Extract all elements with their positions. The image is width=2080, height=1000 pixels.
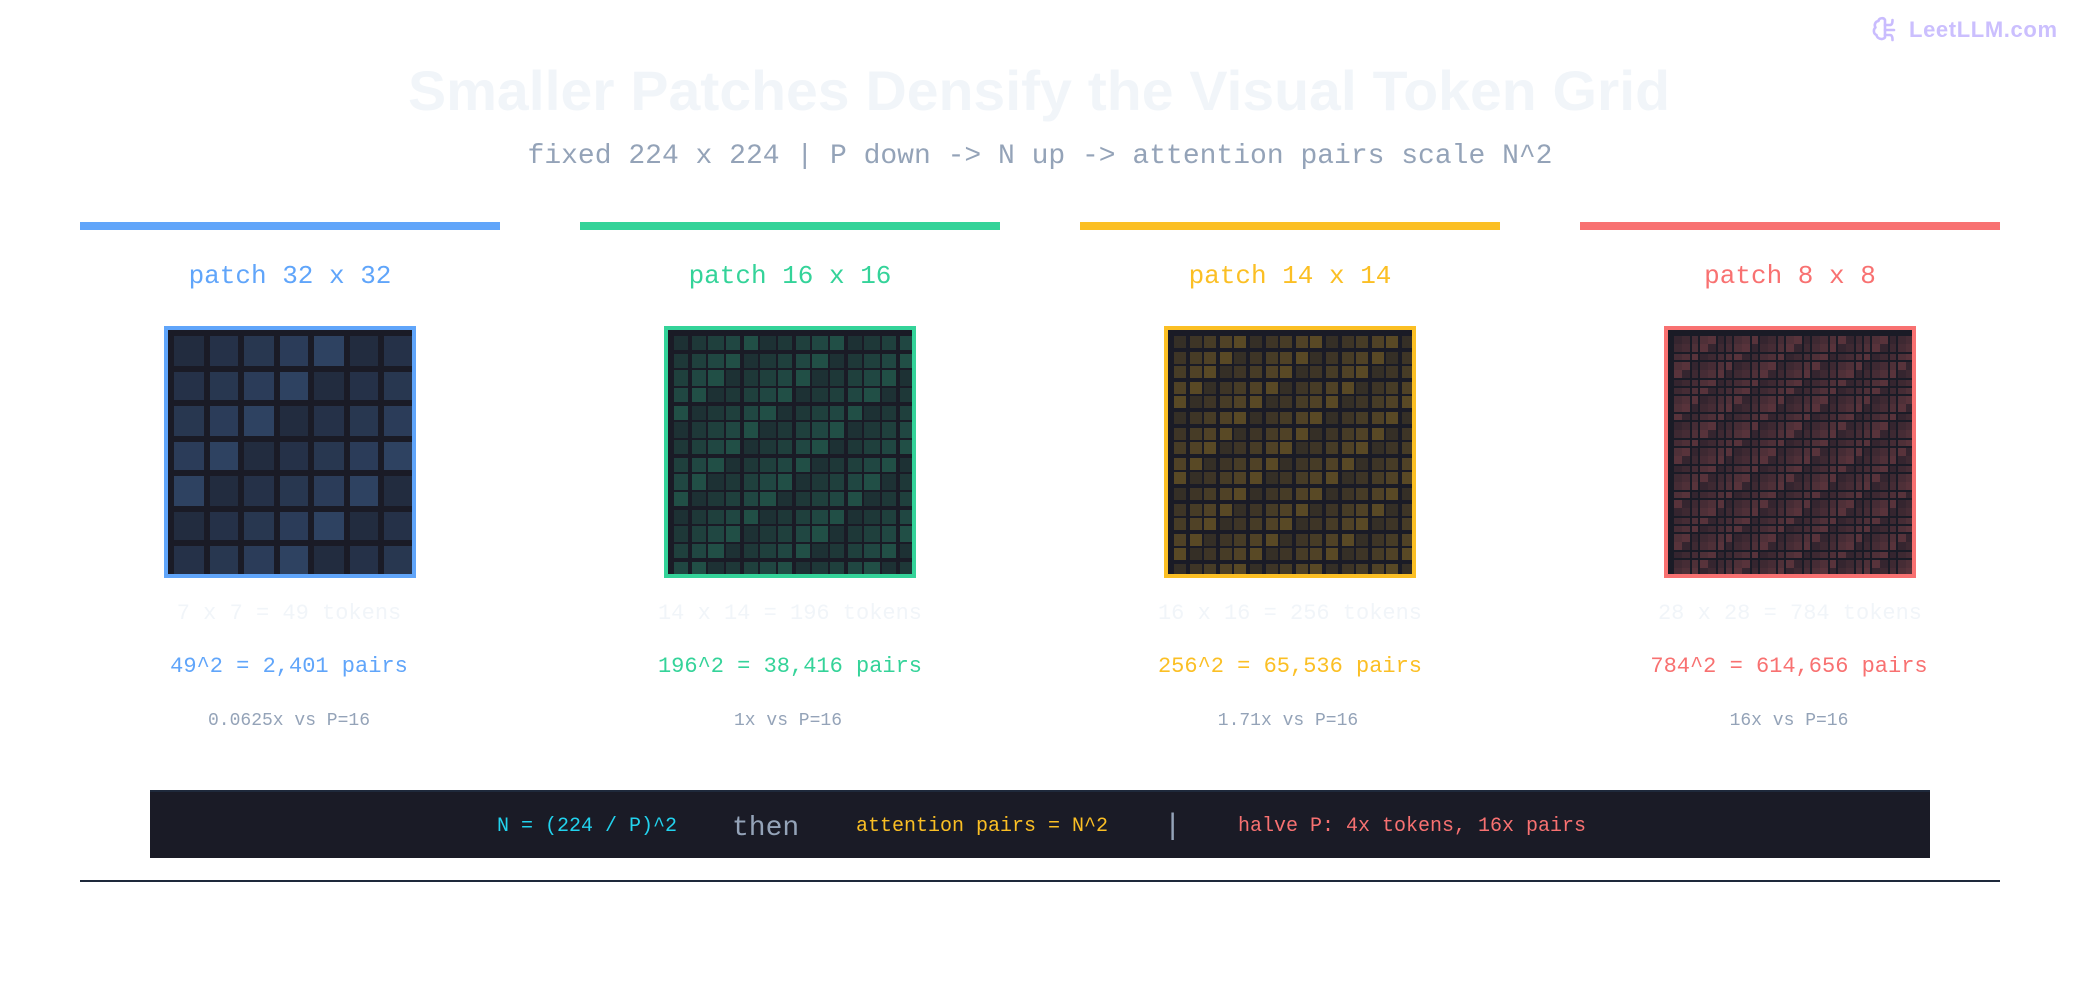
- formula bar: [150, 790, 1930, 858]
- patch grid: 28 x 28: [1666, 328, 1914, 576]
- accent bar: green: [580, 222, 1000, 230]
- subtitle: fixed 224 x 224 | P down -> N up -> attention pairs scale N^2: [528, 141, 1552, 172]
- patch grid: 14 x 14: [666, 328, 914, 576]
- heading: patch 8 x 8: patch 8 x 8: [1704, 261, 1876, 291]
- rule: halving P: halve P: 4x tokens, 16x pairs: [1238, 815, 1586, 838]
- token count: 14 x 14 = 196 tokens: [658, 601, 922, 626]
- attention pairs: 256^2 = 65,536 pairs: [1158, 654, 1422, 679]
- bar background: [150, 790, 1930, 858]
- formula: token count: N = (224 / P)^2: [497, 815, 677, 838]
- logo text: LeetLLM.com: [1909, 17, 2057, 42]
- formula: attention pairs: attention pairs = N^2: [856, 815, 1108, 838]
- token count: 28 x 28 = 784 tokens: [1658, 601, 1922, 626]
- attention pairs: 49^2 = 2,401 pairs: [170, 654, 408, 679]
- panel: patch 14 x 14: [1080, 222, 1500, 731]
- heading: patch 16 x 16: patch 16 x 16: [689, 261, 891, 291]
- separator: |: [1164, 810, 1182, 844]
- patch grid: 16 x 16: [1166, 328, 1414, 576]
- ratio: 0.0625x vs P=16: [208, 711, 370, 731]
- heading: patch 14 x 14: patch 14 x 14: [1189, 261, 1391, 291]
- logo: LeetLLM.com: [1874, 17, 2057, 42]
- attention pairs: 784^2 = 614,656 pairs: [1650, 654, 1928, 679]
- panel: patch 8 x 8: [1580, 222, 2000, 731]
- heading: patch 32 x 32: patch 32 x 32: [189, 261, 391, 291]
- token count: 7 x 7 = 49 tokens: [177, 601, 401, 626]
- ratio: 1.71x vs P=16: [1218, 711, 1358, 731]
- attention pairs: 196^2 = 38,416 pairs: [658, 654, 922, 679]
- ratio: 1x vs P=16: [734, 711, 842, 731]
- panel: patch 16 x 16: [580, 222, 1000, 731]
- accent bar: blue: [80, 222, 500, 230]
- connector: then: then: [732, 813, 799, 844]
- ratio: 16x vs P=16: [1730, 711, 1848, 731]
- accent bar: red: [1580, 222, 2000, 230]
- patch grid: 7 x 7: [166, 328, 414, 576]
- icon: brain: [1874, 18, 1894, 40]
- panel: patch 32 x 32: [80, 222, 500, 731]
- title: Smaller Patches Densify the Visual Token Grid: [408, 59, 1670, 122]
- token count: 16 x 16 = 256 tokens: [1158, 601, 1422, 626]
- accent bar: amber: [1080, 222, 1500, 230]
